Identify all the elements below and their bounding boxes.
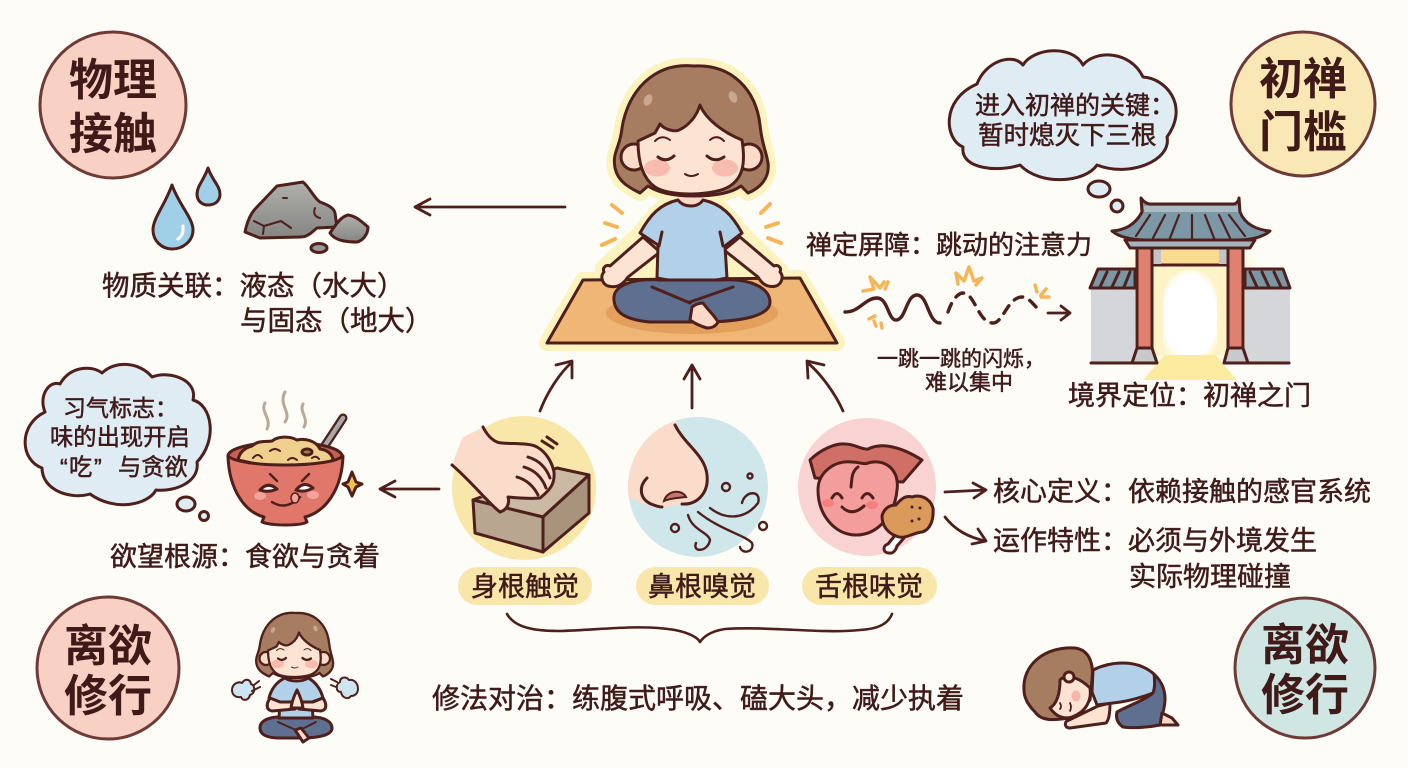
text: 境界定位: 境界定位：初禅之门: [1068, 381, 1311, 411]
text: 欲望根源: 欲望根源：食欲与贪着: [110, 542, 380, 572]
face: [254, 492, 266, 500]
bowl rear: [228, 442, 342, 470]
badge: 离欲修行 right: 离欲: [1261, 621, 1349, 670]
foot: [690, 303, 718, 328]
bowl body: [228, 456, 343, 525]
text: 禅定屏障: 禅定屏障：跳动的注意力: [806, 230, 1092, 260]
panel: touch sense: [452, 416, 596, 560]
badge: 初禅门槛: 门槛: [1259, 108, 1347, 157]
label: 身根触觉: [458, 567, 592, 605]
badge: 初禅门槛: 初禅: [1259, 55, 1347, 104]
rice: [238, 437, 333, 470]
label: 舌根味觉: [802, 567, 937, 605]
chicken: [884, 533, 904, 553]
text: 运作特性: 实际物理碰撞: [1129, 562, 1291, 592]
label: 鼻根嗅觉: 鼻根嗅觉: [648, 572, 756, 602]
arm: [1065, 703, 1110, 728]
arms: [602, 237, 660, 287]
text: 物质关联: 物质关联：液态（水大）: [102, 270, 404, 301]
icon: bowl of food: [228, 392, 362, 525]
illustration: gate: [1090, 198, 1290, 380]
pillars: [1137, 248, 1152, 348]
icon: water drops: [153, 168, 220, 249]
bubble: 进入初禅的关键: 暂时熄灭下三根: [978, 122, 1157, 150]
badge: 离欲修行 right: 修行: [1261, 671, 1349, 720]
badge: 初禅门槛: [1231, 32, 1375, 176]
arrow: to matter: [415, 199, 565, 215]
rays: [602, 204, 781, 245]
text: 核心定义: 核心定义：依赖接触的感官系统: [993, 477, 1371, 507]
badge: 离欲修行 left: 离欲: [64, 622, 152, 671]
figure: small meditating person: [232, 613, 358, 742]
nose: [628, 421, 706, 508]
pants: [1117, 675, 1165, 728]
arrow: to bowl: [380, 481, 439, 497]
shirt: [269, 678, 323, 718]
bubble: 习气标志: 味的出现开启: [50, 424, 190, 450]
mat: [547, 278, 837, 343]
bubble: 习气标志: 吃: [69, 454, 92, 480]
lips: [810, 444, 922, 482]
text: 运作特性: 运作特性：必须与外境发生: [993, 526, 1317, 556]
lintel: [1152, 248, 1228, 265]
hair: [1024, 648, 1092, 720]
icon: rocks: [245, 182, 368, 252]
badge: 离欲修行 left: [37, 597, 179, 739]
bubble: 习气标志: 与贪欲: [118, 454, 188, 480]
badge: 离欲修行 left: 修行: [64, 672, 152, 721]
text: 闪烁 caption: 一跳一跳的闪烁，: [877, 348, 1045, 371]
text: 闪烁 caption: [877, 348, 1045, 395]
spoon: [322, 418, 343, 450]
arrows to definitions: [945, 483, 986, 544]
shirt: [1092, 663, 1155, 705]
bubble: 习气标志: ”: [94, 454, 102, 480]
legs: [260, 717, 332, 738]
label: 身根触觉: 身根触觉: [471, 572, 579, 602]
head: [614, 66, 768, 196]
badge: 离欲修行 right: [1235, 598, 1375, 738]
neck: [678, 190, 703, 206]
bubble: 习气标志: [25, 364, 210, 520]
text: 修法对治: 修法对治：练腹式呼吸、磕大头，减少执着: [432, 683, 964, 714]
sparkle: [343, 472, 362, 496]
walls: [1091, 288, 1290, 363]
badge: 物理接触: 物理: [69, 56, 157, 105]
hand: [452, 427, 555, 512]
steam: [264, 392, 305, 429]
panel: smell sense: [620, 417, 768, 557]
label: 鼻根嗅觉: [636, 567, 769, 605]
hands: [291, 690, 303, 708]
chart: attention wave: [845, 267, 1070, 328]
text: 物质关联: [102, 270, 432, 336]
badge: 物理接触: [40, 32, 186, 178]
bubble: 习气标志: “: [60, 454, 68, 480]
glow: [1100, 220, 1280, 380]
shirt: [640, 200, 742, 282]
label: 舌根味觉: 舌根味觉: [815, 572, 923, 602]
glow outline: [547, 66, 837, 343]
roof: [1112, 198, 1270, 240]
arrows up to figure: [540, 361, 843, 411]
figure: central meditating person: [547, 66, 837, 343]
opening: [1152, 265, 1228, 355]
head: [256, 613, 333, 678]
text: 物质关联: 与固态（地大）: [240, 305, 432, 336]
text: 闪烁 caption: 难以集中: [925, 370, 1013, 395]
bubble: 进入初禅的关键: [949, 51, 1176, 212]
foot: [1160, 713, 1178, 725]
badge: 物理接触: 接触: [69, 110, 157, 159]
legs: [614, 280, 770, 322]
arms: [267, 698, 326, 711]
tongue: [818, 462, 897, 535]
face: [1050, 677, 1090, 718]
panel: taste sense: [798, 418, 936, 556]
breath clouds: [232, 678, 358, 700]
bubble: 习气标志: 习气标志：: [63, 395, 178, 421]
swirls: [671, 474, 767, 552]
block: [473, 468, 589, 517]
figure: bowing person: [1024, 648, 1178, 728]
brace: [507, 614, 892, 642]
bubble: 进入初禅的关键: 进入初禅的关键：: [975, 92, 1175, 120]
text: 运作特性: [993, 526, 1317, 592]
